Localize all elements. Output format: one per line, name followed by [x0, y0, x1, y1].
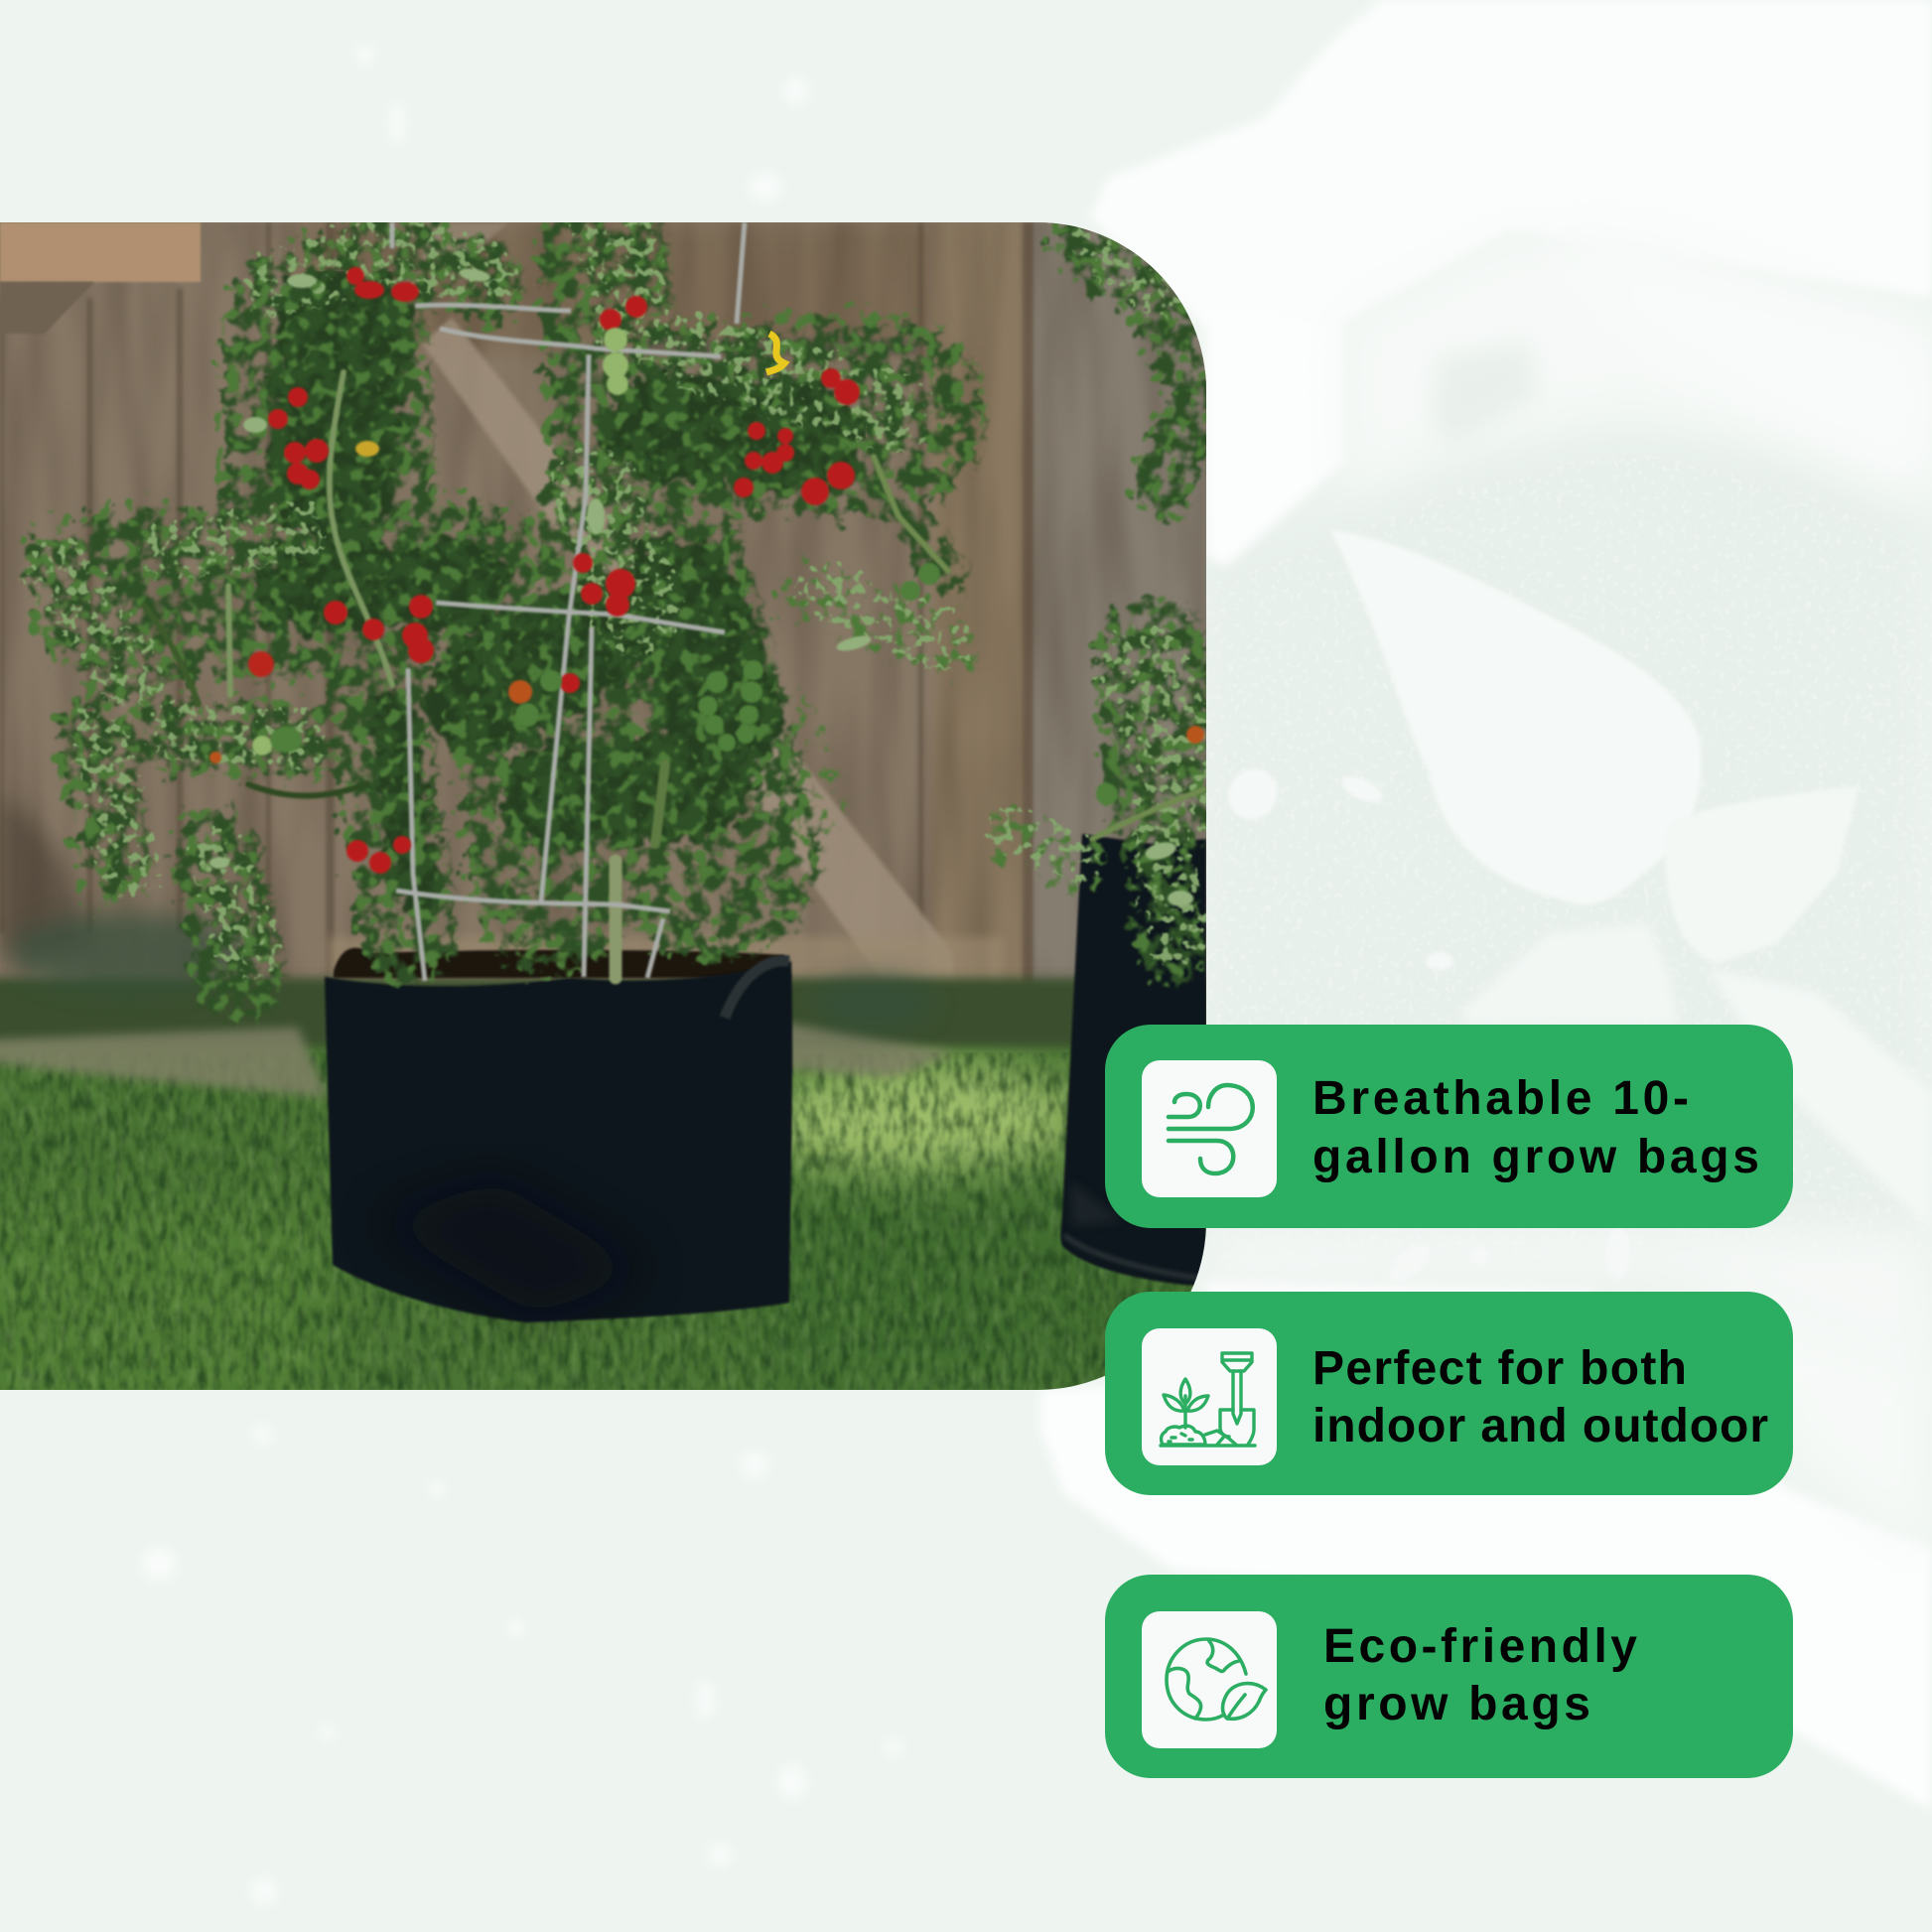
tan board, upper left	[0, 222, 201, 282]
card text: indoor and outdoor	[1312, 1400, 1768, 1452]
plant foliage, dark core	[298, 328, 814, 894]
fence diagonal brace	[422, 318, 953, 983]
card text: Perfect for both	[1312, 1342, 1687, 1395]
plant foliage, dark layer	[60, 243, 1203, 978]
bokeh specks	[142, 45, 901, 1904]
card text: Eco-friendly	[1323, 1620, 1637, 1673]
icon tile: wind	[1142, 1060, 1277, 1197]
grow bag, far right	[1060, 834, 1206, 1287]
card: eco-friendly	[1105, 1575, 1793, 1778]
plant foliage, light layer	[60, 238, 1191, 953]
card text: grow bags	[1323, 1678, 1590, 1730]
card: breathable grow bags	[1105, 1025, 1793, 1228]
wire cages	[392, 222, 745, 981]
soil texture region	[1191, 421, 1932, 1291]
plant foliage, mid layer	[69, 243, 1203, 978]
card: indoor and outdoor	[1105, 1292, 1793, 1495]
wooden fence	[0, 222, 1206, 1046]
card text: gallon grow bags	[1312, 1131, 1759, 1183]
pale highlight leaves	[209, 266, 1193, 906]
lawn	[0, 913, 1236, 1420]
tomatoes, green	[252, 328, 1118, 805]
card text: Breathable 10-	[1312, 1072, 1689, 1125]
pale leaves	[1330, 530, 1932, 1231]
soil pebbles	[1219, 759, 1630, 1288]
icon tile: plant and shovel	[1142, 1328, 1277, 1465]
yellow plant clip	[766, 334, 784, 372]
tomatoes, red	[209, 267, 1204, 874]
grow bag, main	[325, 948, 792, 1322]
card text	[1312, 1072, 1759, 1183]
card text	[1312, 1342, 1768, 1452]
plant stems	[144, 372, 1204, 978]
pale hand shape, bottom right	[1040, 1231, 1932, 1810]
icon tile: globe and leaf	[1142, 1611, 1277, 1748]
pale hand shape, top right	[1090, 0, 1932, 566]
card text	[1323, 1620, 1637, 1730]
photo: tomato plants in grow bags	[0, 222, 1236, 1420]
